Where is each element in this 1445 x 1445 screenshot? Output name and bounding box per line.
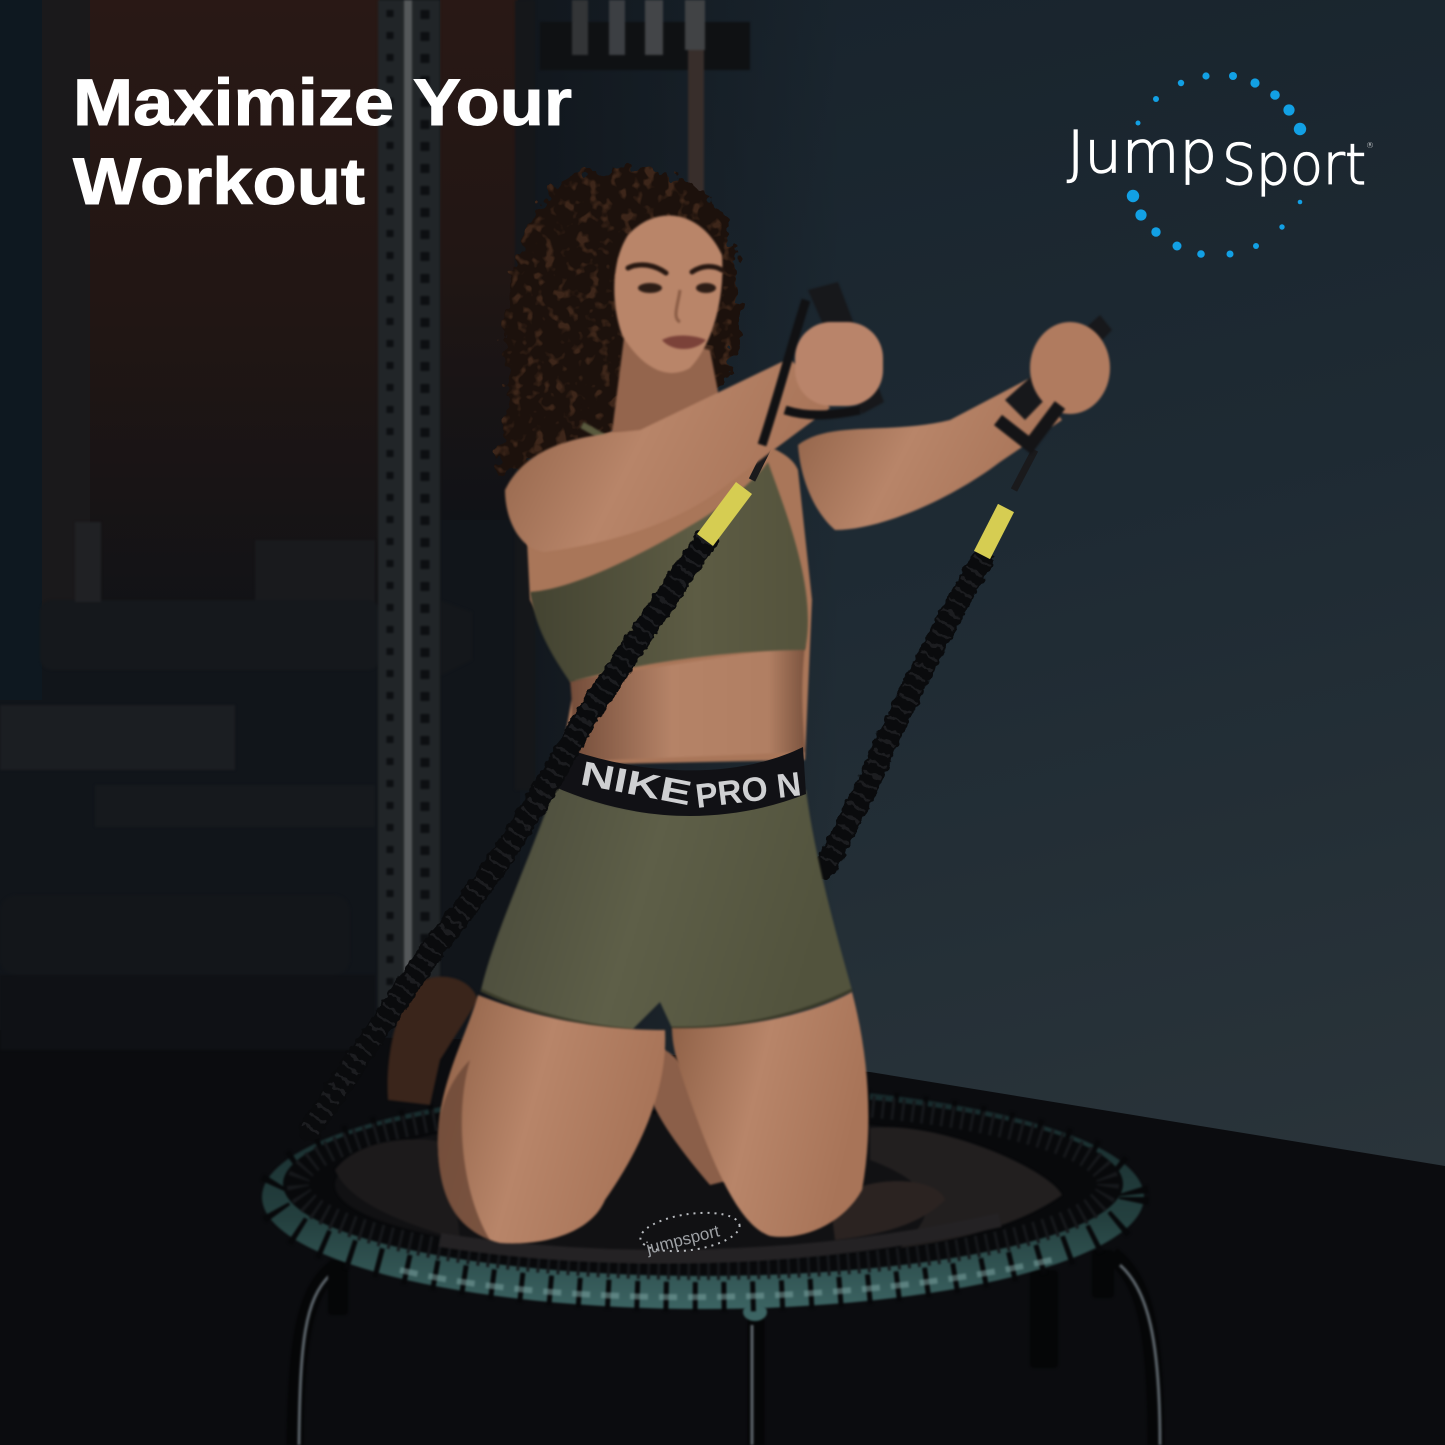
athlete: neck and face bbox=[612, 215, 725, 439]
gym shelves and dumbbells bbox=[0, 522, 472, 1050]
rebounder: legs bbox=[295, 1250, 1160, 1445]
logo: wordmark: Sport bbox=[1222, 133, 1366, 198]
logo: wordmark: ® bbox=[1366, 141, 1374, 150]
logo: JumpSport bbox=[1067, 72, 1374, 258]
athlete: left arm and fist bbox=[505, 282, 884, 552]
athlete: sports bra bbox=[530, 425, 808, 682]
rack uprights and barbells bbox=[378, 0, 750, 1010]
athlete: waistband bbox=[553, 747, 806, 816]
rebounder: mat and skirt bbox=[335, 1113, 1062, 1257]
title: Maximize Your bbox=[73, 65, 572, 139]
title: Workout bbox=[73, 144, 365, 218]
logo: wordmark bbox=[1067, 118, 1374, 198]
resistance band: rear bbox=[825, 560, 982, 868]
band connectors: yellow sleeves bbox=[705, 440, 1035, 555]
mat logo: jumpsport bbox=[643, 1221, 722, 1258]
resistance band: front bbox=[310, 540, 706, 1130]
logo: wordmark: Jump bbox=[1067, 118, 1217, 186]
athlete: torso bbox=[525, 425, 812, 765]
rebounder: ring and bungee loops bbox=[262, 1085, 1144, 1309]
logo: dotted ring bbox=[1127, 72, 1306, 258]
title bbox=[73, 65, 572, 218]
athlete: thighs and knees bbox=[438, 992, 868, 1243]
athlete: waistband: PRO N bbox=[693, 765, 803, 816]
athlete: hair bbox=[496, 168, 740, 475]
athlete: right arm and fist bbox=[798, 315, 1112, 530]
floor bbox=[0, 1030, 1445, 1445]
athlete: waistband: NIKE bbox=[577, 755, 695, 813]
athlete: far foot and shoe bbox=[387, 977, 730, 1185]
athlete: shorts bbox=[481, 785, 852, 1030]
mat logo bbox=[638, 1207, 742, 1258]
